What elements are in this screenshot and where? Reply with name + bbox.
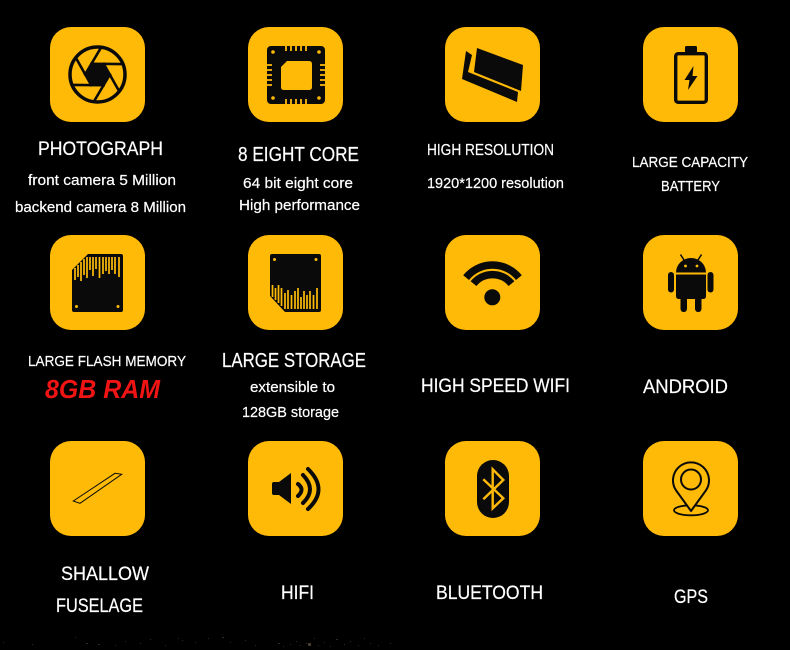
text: backend camera: backend camera 8 Million [15, 200, 186, 216]
text: 64 bit: 64 bit eight core [243, 176, 353, 192]
heading: large capacity battery: BATTERY [661, 179, 720, 195]
heading: shallow fuselage [56, 564, 149, 617]
icon: thin device outline [50, 441, 145, 536]
text: extensible to: extensible to [250, 380, 335, 396]
feature: hifi [248, 441, 343, 604]
heading: large capacity battery: LARGE CAPACITY [632, 155, 748, 171]
feature: eight core [238, 27, 360, 214]
text: high performance: High performance [239, 198, 360, 214]
icon: camera aperture [50, 27, 145, 122]
feature: android [643, 235, 738, 398]
callout: 8GB RAM: 8GB RAM [45, 374, 161, 404]
heading: gps: GPS [674, 587, 708, 608]
icon: android robot [643, 235, 738, 330]
icon: battery [643, 27, 738, 122]
heading: high resolution: HIGH RESOLUTION [427, 142, 554, 159]
texture: bottom speckle [3, 637, 391, 647]
icon: bluetooth [445, 441, 540, 536]
heading: shallow fuselage: SHALLOW [61, 564, 149, 585]
heading: hifi: HIFI [281, 583, 314, 604]
heading: eight core: 8 EIGHT CORE [238, 144, 359, 166]
icon: memory card [50, 235, 145, 330]
heading: large storage: LARGE STORAGE [222, 350, 366, 372]
feature: high resolution [427, 27, 564, 192]
feature: flash memory [28, 235, 186, 404]
icon: screen panels [445, 27, 540, 122]
text: front camera: front camera 5 Million [28, 173, 176, 189]
icon: wifi [445, 235, 540, 330]
text: resolution value: 1920*1200 resolution [427, 176, 564, 192]
icon: map pin [643, 441, 738, 536]
feature: photograph [15, 27, 186, 216]
feature: bluetooth [436, 441, 543, 604]
feature: shallow fuselage [50, 441, 149, 617]
icon: speaker [248, 441, 343, 536]
heading: large flash memory: LARGE FLASH MEMORY [28, 354, 186, 370]
feature: battery [632, 27, 748, 195]
heading: android: ANDROID [643, 377, 728, 398]
heading: photograph: PHOTOGRAPH [38, 139, 163, 160]
feature: gps [643, 441, 738, 608]
icon: storage card [248, 235, 343, 330]
feature: large storage [222, 235, 366, 421]
text: 128GB storage: 128GB storage [242, 405, 339, 421]
heading: shallow fuselage: FUSELAGE [56, 596, 143, 617]
feature: wifi [421, 235, 570, 397]
icon: processor chip [248, 27, 343, 122]
heading: high speed wifi: HIGH SPEED WIFI [421, 376, 570, 397]
heading: bluetooth: BLUETOOTH [436, 583, 543, 604]
heading: large capacity battery [632, 155, 748, 195]
